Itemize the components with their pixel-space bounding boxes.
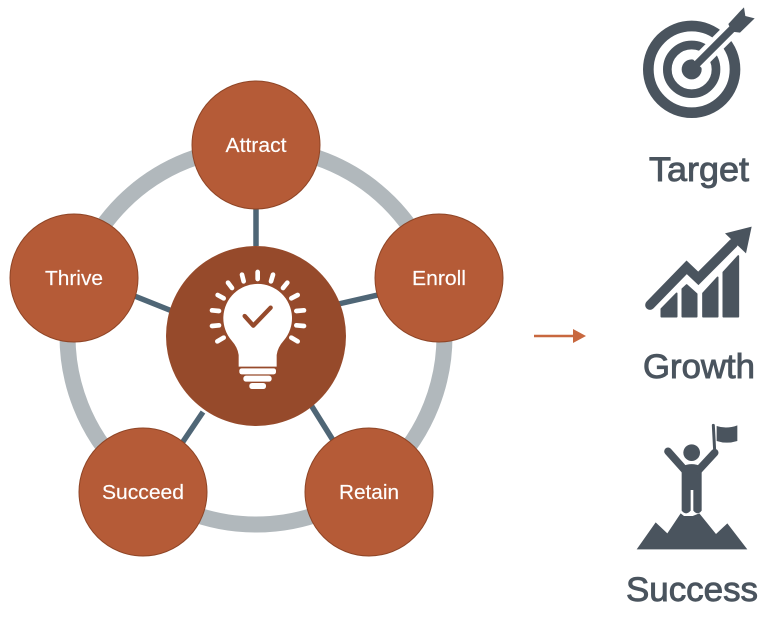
node: Attract bbox=[192, 81, 320, 209]
node: Succeed bbox=[79, 428, 207, 556]
icon: growth chart bbox=[650, 227, 752, 317]
node: Retain bbox=[305, 428, 433, 556]
label: Success: Success bbox=[626, 571, 758, 609]
node: Attract: Attract bbox=[226, 134, 287, 157]
arrow bbox=[534, 329, 586, 343]
node: Enroll: Enroll bbox=[412, 267, 466, 290]
label: Target: Target bbox=[649, 151, 749, 189]
node: Succeed: Succeed bbox=[102, 481, 184, 504]
label: Growth: Growth bbox=[643, 348, 755, 386]
node: Enroll bbox=[375, 214, 503, 342]
outer ring bbox=[68, 148, 444, 524]
center circle bbox=[166, 246, 346, 426]
node: Thrive: Thrive bbox=[45, 267, 103, 290]
icon: person with flag on mountain bbox=[637, 425, 747, 549]
icon: lightbulb with check mark bbox=[212, 272, 304, 389]
node: Thrive bbox=[10, 214, 138, 342]
cycle diagram bbox=[10, 81, 503, 556]
icon: target bbox=[648, 7, 755, 113]
spokes bbox=[132, 205, 382, 452]
node: Retain: Retain bbox=[339, 481, 399, 504]
